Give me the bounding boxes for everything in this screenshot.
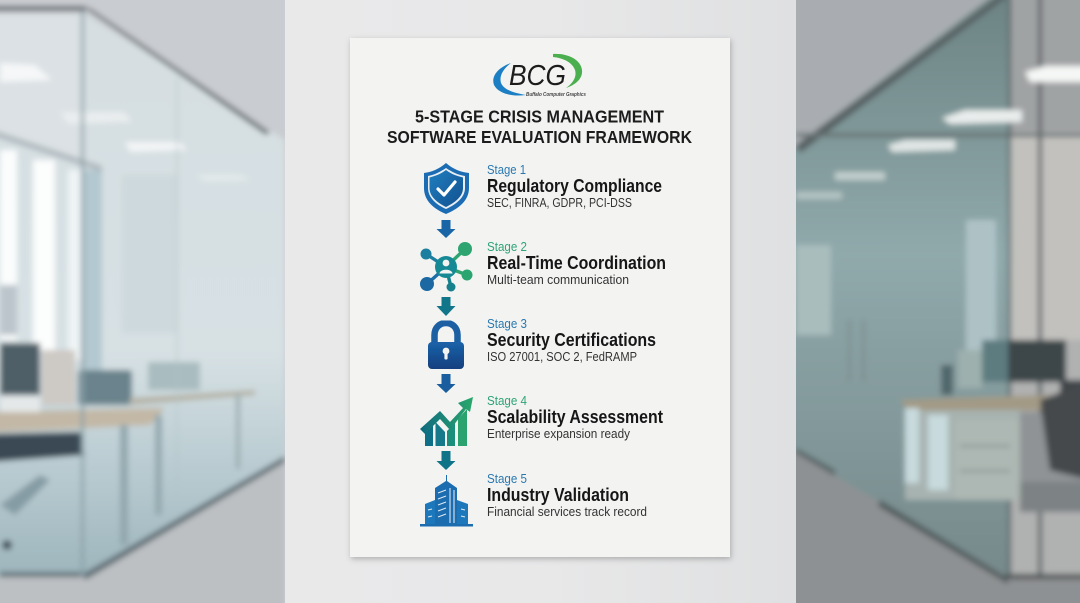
stage 4 text: Enterprise expansion ready xyxy=(487,427,631,441)
arrow 1 xyxy=(436,220,456,238)
stage 4 text xyxy=(487,394,663,441)
logo: BCG: BCG xyxy=(509,60,566,92)
stage 3 text: Stage 3 xyxy=(487,317,527,331)
stage 5 text: Stage 5 xyxy=(487,472,527,486)
stage 5 icon: office building xyxy=(420,475,473,526)
stage 1 text: SEC, FINRA, GDPR, PCI-DSS xyxy=(487,196,632,210)
stage 3 icon: padlock xyxy=(428,323,464,369)
stage 4 icon: growth chart xyxy=(420,397,473,446)
stage 1 text: Regulatory Compliance xyxy=(487,176,662,196)
stage 3 text xyxy=(487,317,656,364)
stage 2 text: Real-Time Coordination xyxy=(487,253,666,273)
stage 1 text xyxy=(487,163,662,210)
stage 2 text: Stage 2 xyxy=(487,240,527,254)
title: 5-STAGE CRISIS MANAGEMENT xyxy=(415,106,664,126)
stage 3 text: Security Certifications xyxy=(487,330,656,350)
title xyxy=(387,106,692,147)
stage 2 text: Multi-team communication xyxy=(487,273,629,287)
stage 2 icon: network xyxy=(420,242,472,292)
stage 3 text: ISO 27001, SOC 2, FedRAMP xyxy=(487,350,637,364)
stage 4 text: Stage 4 xyxy=(487,394,527,408)
poster xyxy=(350,38,730,557)
stage 5 text xyxy=(487,472,647,519)
stage 1 text: Stage 1 xyxy=(487,163,526,177)
background: right office through glass xyxy=(790,0,1080,603)
stage 5 text: Industry Validation xyxy=(487,485,629,505)
logo: BCG xyxy=(493,54,586,98)
arrow 2 xyxy=(436,297,456,316)
stage 5 text: Financial services track record xyxy=(487,505,647,519)
stage 2 text xyxy=(487,240,666,287)
stage 1 icon: shield xyxy=(424,163,469,214)
arrow 4 xyxy=(436,451,456,470)
logo: BCG: Buffalo Computer Graphics xyxy=(526,92,586,98)
wall xyxy=(285,0,796,603)
title: SOFTWARE EVALUATION FRAMEWORK xyxy=(387,127,692,147)
arrow 3 xyxy=(436,374,456,393)
background: left office through glass xyxy=(0,0,290,603)
stage 4 text: Scalability Assessment xyxy=(487,407,663,427)
